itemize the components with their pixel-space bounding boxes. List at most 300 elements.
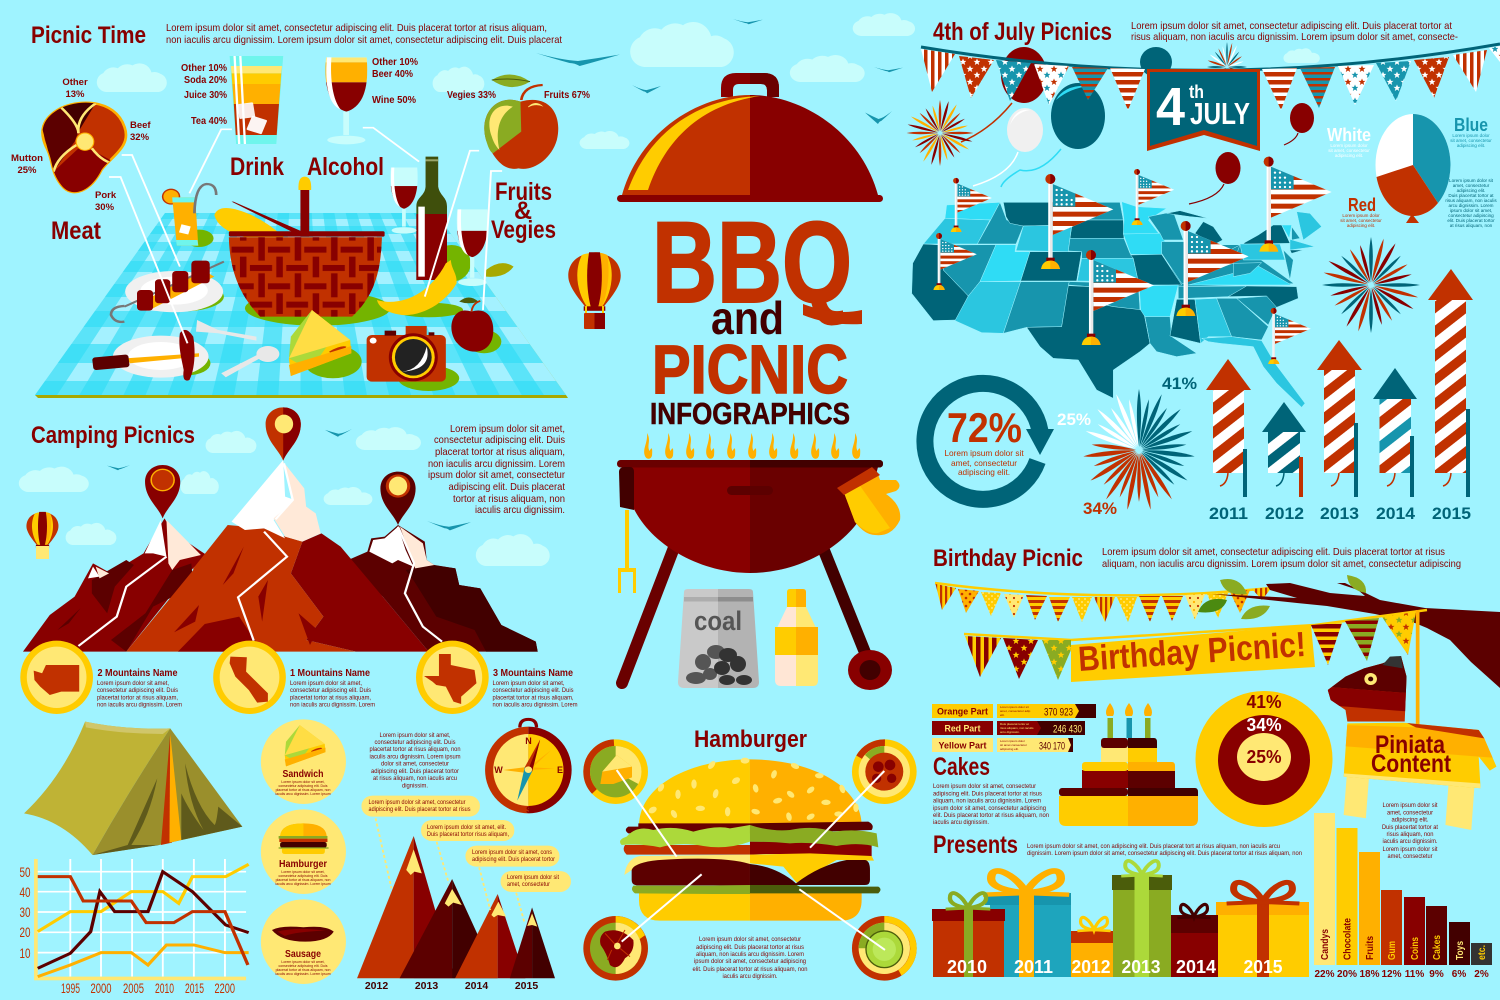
gingham picnic blanket bbox=[35, 213, 568, 398]
heading: Presents: Presents bbox=[933, 831, 1018, 859]
panel: birthday picnic bbox=[932, 545, 1500, 980]
July intro text: Lorem ipsum dolor sit amet, consectetur adipiscing elit. Duis placerat tortor at bbox=[1131, 20, 1452, 32]
gift 2012 bbox=[1071, 917, 1113, 977]
pie label: Blue: Lorem ipsum dolor bbox=[1452, 133, 1490, 138]
labels: drink glass: Tea 40% bbox=[191, 116, 227, 127]
ingredient ring: lime bbox=[852, 916, 917, 981]
pie side text bbox=[1445, 178, 1497, 228]
peak year labels: 2014 bbox=[465, 980, 488, 992]
pinata label: Content bbox=[1371, 750, 1452, 778]
July intro text: risus aliquam, non iaculis arcu dignissim. Lorem ipsum dolor sit amet, consecte- bbox=[1131, 31, 1458, 43]
camping paragraph: Lorem ipsum dolor sit amet, bbox=[380, 732, 451, 739]
speech bubble texts: amet, consectetur bbox=[507, 882, 550, 888]
mountain caption 1: 1 Mountains Name bbox=[290, 667, 370, 679]
section labels: Alcohol bbox=[307, 153, 384, 181]
intro text: Lorem ipsum dolor sit amet, consectetur adipiscing elit. Duis placerat tortor at risus aliquam, bbox=[166, 22, 547, 34]
icon: banana bbox=[377, 260, 457, 315]
hamburger paragraph bbox=[692, 936, 808, 980]
chart axis labels: 10 bbox=[20, 945, 31, 961]
speech bubble texts: Duis placerat tortor risus aliquam, bbox=[427, 832, 509, 838]
icon: hamburger small bbox=[279, 823, 329, 854]
bar percent labels bbox=[1314, 969, 1489, 980]
mountain caption 1 bbox=[290, 667, 375, 708]
sky clouds and birds bbox=[19, 13, 1320, 566]
mountain caption 3: placertat tortor at risus aliquam, bbox=[492, 694, 574, 702]
food circle: hamburger text bbox=[275, 858, 331, 886]
speech bubble texts: Lorem ipsum dolor sit amet, cons bbox=[472, 850, 552, 856]
ingredient ring: tomato bbox=[845, 732, 924, 811]
icon: steak chart bbox=[38, 100, 126, 200]
legend row: red part: Duis placerat tortor at bbox=[1000, 722, 1029, 726]
pie label: Blue: Blue bbox=[1454, 115, 1488, 135]
pie label: White: adipiscing elit. bbox=[1335, 153, 1363, 158]
speech bubble texts: adipiscing elit. Duis placerat tortor at risus bbox=[368, 807, 470, 813]
legend row: red part bbox=[932, 721, 1085, 736]
mountain caption 1: placertat tortor at risus aliquam, bbox=[290, 694, 371, 702]
mountain caption 2: consectetur adipiscing elit. Duis bbox=[97, 687, 179, 694]
speech bubble texts: adipiscing elit. Duis placerat tortor bbox=[472, 857, 555, 863]
labels: wine glass: Wine 50% bbox=[372, 95, 416, 106]
burger callout lines bbox=[617, 770, 885, 950]
icon: birthday cake bbox=[1059, 703, 1198, 826]
firework right bbox=[1304, 219, 1438, 351]
flags on map bbox=[933, 157, 1334, 364]
hamburger paragraph: elit. Duis placerat tortor at risus aliquam, non bbox=[692, 966, 808, 973]
rocket years: 2013 bbox=[1320, 504, 1359, 523]
rocket years: 2012 bbox=[1265, 504, 1304, 523]
bar percent labels: 22% bbox=[1314, 969, 1335, 980]
tomato and onion bbox=[624, 822, 873, 857]
pie side text: risus aliquam, non iaculis bbox=[1445, 198, 1497, 203]
gift years: 2010 bbox=[947, 957, 987, 977]
icon: coal bag: coal bbox=[694, 606, 742, 636]
camping paragraph: at risus aliquam, non iaculis arcu bbox=[373, 775, 457, 782]
chart axis labels: 2015 bbox=[185, 980, 204, 996]
bar category labels: Toys bbox=[1455, 941, 1466, 960]
chart axis labels: 50 bbox=[20, 864, 31, 880]
flames bbox=[644, 433, 860, 459]
pie label: Blue: adipiscing elit. bbox=[1457, 143, 1485, 148]
legend row: red part: arcu dignissim. bbox=[1000, 730, 1020, 734]
icon: kebab plate bbox=[111, 261, 224, 322]
mountain caption 1: non iaculis arcu dignissim. Lorem bbox=[290, 702, 375, 708]
icon: wine glass chart bbox=[325, 57, 368, 144]
pie label: Blue: sit amet, consectetur bbox=[1450, 138, 1492, 143]
pie label: Red: sit amet, consectetur bbox=[1340, 218, 1382, 223]
compass letters bbox=[494, 736, 563, 815]
icon: small hot air balloon bbox=[26, 512, 59, 559]
middle mountain bbox=[126, 460, 429, 652]
4th July sign: 4 bbox=[1156, 77, 1185, 137]
mountain illustration bbox=[20, 407, 538, 714]
bar percent labels: 11% bbox=[1405, 969, 1424, 980]
gift bar chart bbox=[932, 861, 1309, 977]
food circle: hamburger text: Hamburger bbox=[279, 858, 327, 870]
pinata paragraph bbox=[1382, 802, 1438, 860]
bar percent labels: 6% bbox=[1452, 969, 1466, 980]
camping paragraph: iaculis arcu dignissim. Lorem ipsum bbox=[370, 754, 460, 760]
icon: wicker basket bbox=[229, 177, 385, 317]
icon: camera bbox=[367, 326, 446, 382]
bar percent labels: 2% bbox=[1474, 969, 1489, 980]
speech bubble texts bbox=[368, 800, 559, 888]
chart axis labels: 20 bbox=[20, 924, 31, 940]
panel: hamburger bbox=[575, 726, 924, 981]
rocket years bbox=[1209, 504, 1471, 523]
icon: balloon basket centre bbox=[584, 306, 605, 329]
firework left bbox=[894, 88, 986, 178]
cakes text: aliquam, non iaculis arcu dignissim. Lorem bbox=[933, 798, 1041, 804]
picnic scene objects bbox=[38, 56, 558, 391]
food circle: sandwich text: Lorem ipsum dolor sit amet, bbox=[281, 780, 325, 784]
gift 2011 bbox=[983, 871, 1071, 977]
date peaks bbox=[357, 796, 571, 978]
pinata paragraph: Duis placertat tortor at bbox=[1382, 824, 1438, 831]
gift years bbox=[947, 957, 1282, 977]
rocket 2011 bbox=[1206, 359, 1251, 497]
bar category labels: Gum bbox=[1387, 941, 1398, 960]
labels: drink glass: Other 10% bbox=[181, 63, 227, 74]
food circle: hamburger text: iaculis arcu dignissim. Lorem ipsum bbox=[275, 882, 331, 886]
camping paragraph bbox=[370, 732, 461, 790]
legend row: orange part: Lorem ipsum dolor sit bbox=[1000, 705, 1029, 709]
mountain caption 2: Lorem ipsum dolor sit amet, bbox=[97, 680, 169, 687]
gift years: 2012 bbox=[1072, 957, 1110, 977]
pinata contents bar chart bbox=[1314, 813, 1492, 980]
grill bowl bbox=[617, 460, 883, 573]
icon: coal bag bbox=[678, 589, 759, 688]
rocket 2015 bbox=[1428, 269, 1473, 497]
camping intro text: Lorem ipsum dolor sit amet, bbox=[450, 423, 565, 435]
labels: meat chart: 13% bbox=[65, 89, 85, 100]
72% ring chart: amet, consectetur bbox=[951, 458, 1017, 468]
72% ring chart: adipiscing elit. bbox=[958, 467, 1010, 477]
hamburger paragraph: adipiscing elit. Duis placerat tortor at risus bbox=[696, 944, 805, 951]
donut chart: 34% bbox=[1246, 715, 1282, 735]
gift 2014 bbox=[1171, 904, 1218, 977]
icon: small juice glass bbox=[162, 184, 216, 246]
food circle: sausage text: placerat tortor at risus aliquam, non bbox=[276, 968, 330, 972]
mountain caption 2: placertat tortor at risus aliquam, bbox=[97, 694, 178, 702]
right mountain bbox=[344, 525, 538, 652]
labels: meat chart bbox=[11, 77, 151, 213]
pie label: Red: Lorem ipsum dolor bbox=[1342, 213, 1380, 218]
mountain caption 3 bbox=[492, 667, 578, 708]
icon: lighter fluid bottle bbox=[775, 589, 818, 686]
pie label: White: sit amet, consectetur bbox=[1328, 148, 1370, 153]
pie side text: at risus aliquam, non bbox=[1450, 223, 1493, 228]
section labels: Drink bbox=[230, 153, 284, 181]
icon: compass bbox=[485, 719, 572, 813]
mountain caption 1: Lorem ipsum dolor sit amet, bbox=[290, 680, 362, 687]
labels: drink glass: Juice 30% bbox=[184, 90, 227, 101]
4th July sign bbox=[1147, 69, 1260, 151]
peak year labels: 2013 bbox=[415, 980, 438, 992]
labels: apple: Fruits 67% bbox=[544, 90, 590, 101]
gift years: 2013 bbox=[1122, 957, 1160, 977]
bar percent labels: 12% bbox=[1381, 969, 1402, 980]
section labels: Vegies bbox=[491, 216, 556, 244]
bar percent labels: 18% bbox=[1359, 969, 1380, 980]
gift years: 2015 bbox=[1244, 957, 1282, 977]
panel: 4th of July picnics bbox=[894, 18, 1500, 527]
July intro text bbox=[1131, 20, 1458, 43]
mountain caption 3: 3 Mountains Name bbox=[493, 667, 573, 679]
firework percent chart bbox=[1057, 374, 1206, 527]
chart axis labels: 2010 bbox=[155, 980, 174, 996]
cakes text: iaculis arcu dignissim. bbox=[933, 819, 989, 826]
labels: wine glass: Other 10% bbox=[372, 57, 418, 68]
pie side text: Lorem ipsum dolor sit bbox=[1449, 178, 1494, 183]
pie label: Blue bbox=[1450, 115, 1492, 148]
legend row: orange part: elit. bbox=[1000, 713, 1005, 717]
top bun bbox=[639, 758, 862, 825]
bar category labels: Cakes bbox=[1432, 935, 1443, 960]
bar category labels: etc. bbox=[1477, 945, 1488, 960]
labels: meat chart: Beef bbox=[130, 120, 151, 131]
icon: tent bbox=[24, 722, 242, 855]
camping paragraph: dignissim. bbox=[402, 782, 428, 790]
rocket 2012 bbox=[1262, 402, 1306, 497]
pie label: White bbox=[1327, 125, 1371, 158]
labels: drink glass bbox=[181, 63, 227, 127]
chart axis labels bbox=[20, 864, 235, 996]
state badges bbox=[20, 641, 489, 714]
icon: pinata bbox=[1325, 610, 1500, 830]
pie side text: amet, consectetur bbox=[1453, 183, 1490, 188]
compass letters: E bbox=[557, 765, 563, 775]
food circle: sandwich text: Sandwich bbox=[282, 768, 324, 780]
scaled artwork: tent, chart, circles, compass, peaks bbox=[24, 719, 572, 984]
lettuce bbox=[620, 825, 878, 847]
labels: wine glass bbox=[372, 57, 418, 106]
icon: baguette bbox=[214, 208, 284, 237]
food circle: sandwich text bbox=[275, 768, 331, 796]
pie label: Red: Red bbox=[1348, 195, 1376, 215]
grill lid bbox=[617, 73, 883, 202]
section labels: & bbox=[514, 197, 532, 225]
hamburger paragraph: iaculis arcu dignissim. bbox=[722, 973, 778, 980]
camping paragraph: adipiscing elit. Duis placerat tortor bbox=[371, 768, 459, 775]
section labels: Fruits bbox=[495, 178, 552, 206]
presents text bbox=[1027, 843, 1302, 857]
pinata paragraph: amet, consectetur bbox=[1387, 810, 1433, 816]
legend row: yellow part: Lorem ipsum dolor bbox=[1000, 739, 1025, 743]
hamburger paragraph: Lorem ipsum dolor sit amet, consectetur bbox=[699, 936, 802, 943]
pinata paragraph: amet, consectetur bbox=[1388, 853, 1432, 860]
camping intro text: tortor at risus aliquam, non bbox=[453, 493, 565, 505]
pie label: White: White bbox=[1327, 125, 1371, 145]
food circle: hamburger text: consectetur adipiscing elit. Duis bbox=[278, 874, 328, 878]
icon: spoon bbox=[221, 346, 279, 377]
camping intro text bbox=[428, 423, 565, 516]
icon: drink glass chart bbox=[230, 56, 283, 144]
donut chart: 25% bbox=[1246, 747, 1282, 767]
pie side text: consectetur adipiscing bbox=[1448, 213, 1494, 218]
intro text: non iaculis arcu dignissim. Lorem ipsum dolor sit amet, consectetur adipiscing elit. Duis placerat bbox=[166, 34, 562, 46]
small birthday bunting bbox=[935, 583, 1272, 622]
chart axis labels: 40 bbox=[20, 884, 31, 900]
US map with flags bbox=[912, 157, 1334, 407]
route lines bbox=[78, 463, 442, 646]
chart axis labels: 2005 bbox=[123, 980, 144, 996]
rocket years: 2015 bbox=[1432, 504, 1471, 523]
burger illustration bbox=[575, 731, 924, 981]
food circle: sausage text bbox=[275, 948, 331, 976]
pinata paragraph: risus aliquam, non bbox=[1386, 831, 1434, 838]
mountain caption 2: non iaculis arcu dignissim. Lorem bbox=[97, 702, 182, 708]
callout lines bbox=[109, 128, 502, 343]
speech bubble texts: Lorem ipsum dolor sit bbox=[507, 875, 559, 881]
birthday intro text: aliquam, non iaculis arcu dignissim. Lorem ipsum dolor sit amet, consectetur adipiscing bbox=[1102, 558, 1461, 570]
pinata paragraph: Lorem ipsum dolor sit bbox=[1382, 846, 1438, 853]
title: and: and bbox=[711, 292, 784, 344]
gift years: 2011 bbox=[1014, 957, 1053, 977]
title: INFOGRAPHICS: INFOGRAPHICS bbox=[650, 396, 850, 431]
gift years: 2014 bbox=[1176, 957, 1216, 977]
peak year labels: 2015 bbox=[515, 980, 538, 992]
bar category labels bbox=[1320, 918, 1488, 960]
pie side text: arcu dignissim. Lorem bbox=[1449, 203, 1494, 208]
legend row: orange part bbox=[932, 704, 1096, 718]
72% ring chart: 72% bbox=[947, 404, 1022, 451]
mountain caption 3: consectetur adipiscing elit. Duis bbox=[492, 687, 574, 694]
icon: small red balloons bbox=[1189, 103, 1314, 204]
cakes text bbox=[933, 783, 1049, 826]
bunting string and flags bbox=[921, 44, 1500, 110]
legend row: yellow part: Yellow Part bbox=[938, 740, 987, 752]
green shadows bbox=[136, 230, 501, 391]
heading: Birthday Picnic: Birthday Picnic bbox=[933, 545, 1083, 572]
hamburger paragraph: aliquam, non iaculis arcu dignissim. Lorem bbox=[696, 951, 804, 958]
icon: fork bbox=[196, 320, 256, 341]
camping intro text: ipsum dolor sit amet, consectetur bbox=[428, 469, 565, 481]
rocket years: 2011 bbox=[1209, 504, 1248, 523]
mountain caption 2 bbox=[97, 667, 182, 708]
mountain caption 2: 2 Mountains Name bbox=[98, 667, 178, 679]
balloon pie chart bbox=[1376, 114, 1450, 223]
peak year labels: 2012 bbox=[365, 980, 388, 992]
chart axis labels: 2000 bbox=[90, 980, 112, 996]
pie label: White: Lorem ipsum dolor bbox=[1330, 143, 1368, 148]
pinata label bbox=[1371, 731, 1452, 778]
patty bbox=[632, 859, 870, 885]
large birthday bunting and banner bbox=[964, 610, 1427, 682]
pie side text: adipiscing elit. bbox=[1457, 188, 1485, 193]
section labels: Meat bbox=[51, 217, 102, 245]
pie label: Red bbox=[1340, 195, 1382, 228]
panel: camping stats bbox=[20, 719, 572, 996]
labels: meat chart: 30% bbox=[95, 202, 115, 213]
map pins bbox=[145, 407, 416, 525]
mountain caption 3: non iaculis arcu dignissim. Lorem bbox=[492, 702, 578, 708]
panel: picnic time bbox=[0, 22, 600, 398]
speech bubble texts: Lorem ipsum dolor sit amet, consectetur bbox=[368, 800, 466, 806]
pie side text: elit. Duis placerat tortor bbox=[1447, 218, 1495, 223]
labels: meat chart: 32% bbox=[130, 132, 150, 143]
food circle: sausage text: Lorem ipsum dolor sit amet, bbox=[281, 960, 325, 964]
chart axis labels: 1995 bbox=[61, 980, 80, 996]
map states bbox=[912, 202, 1322, 407]
legend row: yellow part bbox=[932, 738, 1073, 752]
grill legs and wheel bbox=[622, 545, 892, 690]
food circle: sandwich text: iaculis arcu dignissim. Lorem ipsum bbox=[275, 792, 331, 796]
legend row: orange part: Orange Part bbox=[937, 706, 989, 718]
labels: apple bbox=[447, 90, 590, 101]
cakes text: elit. Duis placerat tortor at risus aliquam, non bbox=[933, 812, 1049, 819]
heading: Camping Picnics: Camping Picnics bbox=[31, 422, 195, 449]
chart axis labels: 30 bbox=[20, 904, 31, 920]
peak year labels bbox=[365, 980, 538, 992]
large birthday bunting and banner: Birthday Picnic! bbox=[1077, 625, 1307, 679]
firework percent chart: 25% bbox=[1057, 410, 1091, 429]
cheese bbox=[624, 853, 874, 883]
labels: drink glass: Soda 20% bbox=[184, 75, 227, 86]
speech bubble texts: Lorem ipsum dolor sit amet, elit. bbox=[427, 825, 506, 831]
food circle: sausage text: Sausage bbox=[285, 948, 321, 960]
firework percent chart: 34% bbox=[1083, 499, 1117, 518]
birthday intro text bbox=[1102, 546, 1461, 570]
cakes text: Lorem ipsum dolor sit amet, consectetur bbox=[933, 783, 1037, 790]
mountain caption 1: consectetur adipiscing elit. Duis bbox=[290, 687, 372, 694]
legend row: red part: 246 430 bbox=[1053, 724, 1082, 736]
heading: 4th of July Picnics: 4th of July Picnics bbox=[933, 18, 1112, 46]
compass letters: N bbox=[525, 736, 532, 746]
pinata paragraph: adipiscing elit. bbox=[1392, 816, 1429, 824]
rocket years: 2014 bbox=[1376, 504, 1416, 523]
cakes text: ipsum dolor sit amet, consectetur adipiscing bbox=[933, 805, 1046, 812]
tree branch bbox=[1212, 583, 1500, 688]
bar category labels: Coins bbox=[1410, 937, 1421, 960]
pie side text: ipsum dolor sit amet, bbox=[1450, 208, 1492, 213]
icon: sandwich bbox=[289, 310, 351, 376]
ingredient ring: meat bbox=[583, 916, 648, 981]
camping paragraph: consectetur adipiscing elit. Duis bbox=[374, 739, 456, 746]
compass letters: W bbox=[494, 765, 503, 775]
legend row: yellow part: sit amet consectetur bbox=[1000, 743, 1027, 747]
camping paragraph: dolor sit amet, consectetur bbox=[381, 760, 449, 768]
camping intro text: placerat tortor at risus aliquam, bbox=[435, 446, 565, 458]
legend row: orange part: amet, consectetur adip bbox=[1000, 709, 1031, 713]
legend row: yellow part: 340 170 bbox=[1039, 740, 1065, 752]
rocket 2013 bbox=[1317, 340, 1362, 497]
food circle: hamburger text: Lorem ipsum dolor sit amet, bbox=[281, 870, 325, 874]
bottom lettuce strip bbox=[632, 885, 880, 894]
rocket bar chart bbox=[1206, 269, 1473, 523]
4th July sign: JULY bbox=[1190, 96, 1250, 131]
pinata label: Piniata bbox=[1375, 731, 1446, 759]
icon: hot air balloon centre bbox=[568, 252, 621, 311]
title: PICNIC: PICNIC bbox=[652, 331, 848, 408]
gift 2015 bbox=[1216, 882, 1309, 977]
mountain caption 3: Lorem ipsum dolor sit amet, bbox=[492, 680, 565, 687]
camping intro text: iaculis arcu dignissim. bbox=[475, 504, 565, 516]
rocket 2014 bbox=[1373, 368, 1417, 497]
icon: sausage plate bbox=[92, 330, 209, 381]
icon: small wine glass right bbox=[454, 209, 491, 286]
panel: BBQ grill title bbox=[617, 73, 900, 690]
icon: wine bottle bbox=[416, 157, 447, 280]
heading: Hamburger: Hamburger bbox=[694, 726, 807, 753]
pie label: Red: adipiscing elit. bbox=[1347, 223, 1375, 228]
leaves bbox=[1198, 575, 1366, 619]
bar category labels: Candys bbox=[1320, 929, 1331, 960]
icon: oven mitt bbox=[837, 467, 900, 535]
intro text bbox=[166, 22, 562, 46]
labels: meat chart: Mutton bbox=[11, 153, 43, 164]
72% ring chart bbox=[925, 383, 1054, 499]
icon: small apple bbox=[451, 263, 514, 352]
